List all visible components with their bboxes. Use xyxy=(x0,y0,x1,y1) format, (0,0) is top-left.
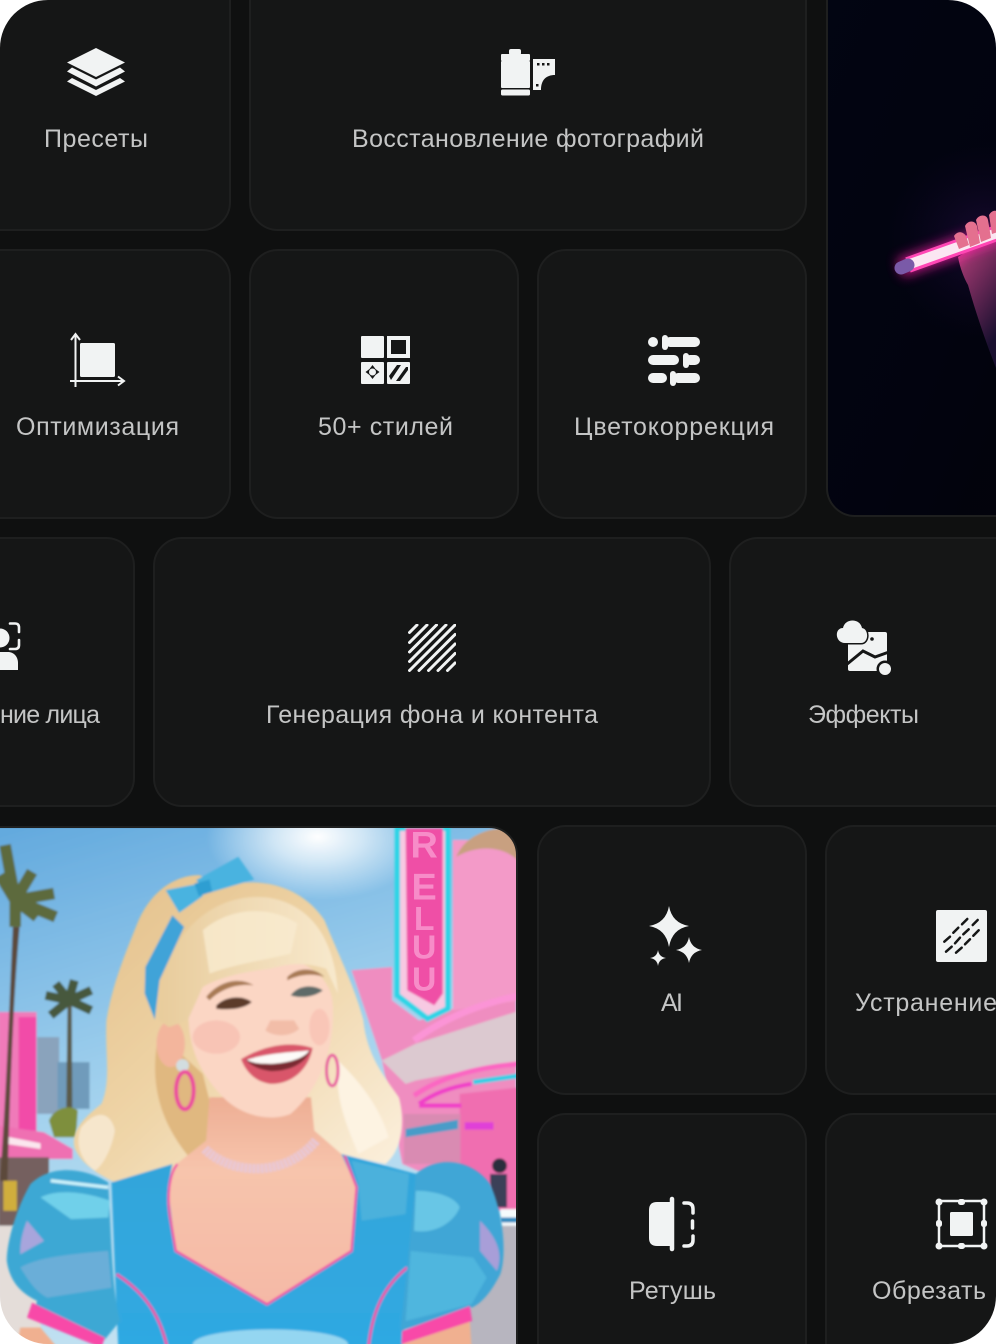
label: Цветокоррекция xyxy=(574,413,774,441)
icon: style grid xyxy=(361,336,410,384)
card: Presets xyxy=(0,0,230,230)
label: AI xyxy=(661,989,683,1017)
card: Noise removal xyxy=(826,826,996,1094)
sign letters: L xyxy=(414,901,435,938)
icon: layers xyxy=(67,48,125,96)
label: Устранение xyxy=(855,989,996,1017)
card: AI xyxy=(538,826,806,1094)
icon: diagonal stripes xyxy=(410,625,455,670)
label: ние лица xyxy=(0,701,100,729)
card: Color correction xyxy=(538,250,806,518)
label: Оптимизация xyxy=(16,413,179,441)
sign letters: U xyxy=(412,930,436,967)
icon: sparkles xyxy=(649,906,702,966)
fingers xyxy=(954,211,996,249)
icon: crop axes xyxy=(70,334,124,387)
panel: portrait photo xyxy=(0,828,516,1344)
icon: half retouch xyxy=(649,1199,693,1249)
card: Retouch xyxy=(538,1114,806,1344)
card: Crop xyxy=(826,1114,996,1344)
icon: noise square xyxy=(936,910,987,962)
neon tube xyxy=(900,232,996,268)
label: Эффекты xyxy=(808,701,919,729)
icon: film roll xyxy=(501,49,555,96)
label: 50+ стилей xyxy=(318,413,453,441)
hand and arm xyxy=(958,232,996,368)
card: Effects xyxy=(730,538,996,806)
icon: sliders xyxy=(648,335,700,386)
background street scene xyxy=(0,828,516,1344)
card: Background and content generation xyxy=(154,538,710,806)
label: Генерация фона и контента xyxy=(266,701,598,729)
sign letters xyxy=(413,832,437,991)
card: 50+ styles xyxy=(250,250,518,518)
icon: crop frame xyxy=(936,1198,988,1250)
sign letters: E xyxy=(412,866,437,907)
label: Восстановление фотографий xyxy=(352,125,704,153)
label: Ретушь xyxy=(629,1277,716,1305)
card: Face xyxy=(0,538,134,806)
sign letters: R xyxy=(411,824,438,865)
icon: effects image xyxy=(837,620,894,678)
label: Обрезать xyxy=(872,1277,986,1305)
card: Optimization xyxy=(0,250,230,518)
label: Пресеты xyxy=(44,125,148,153)
sign letters: U xyxy=(412,962,436,998)
icon: face scan xyxy=(0,624,19,670)
card: Photo restoration xyxy=(250,0,806,230)
panel: neon photo xyxy=(827,0,996,516)
girl xyxy=(7,857,504,1344)
